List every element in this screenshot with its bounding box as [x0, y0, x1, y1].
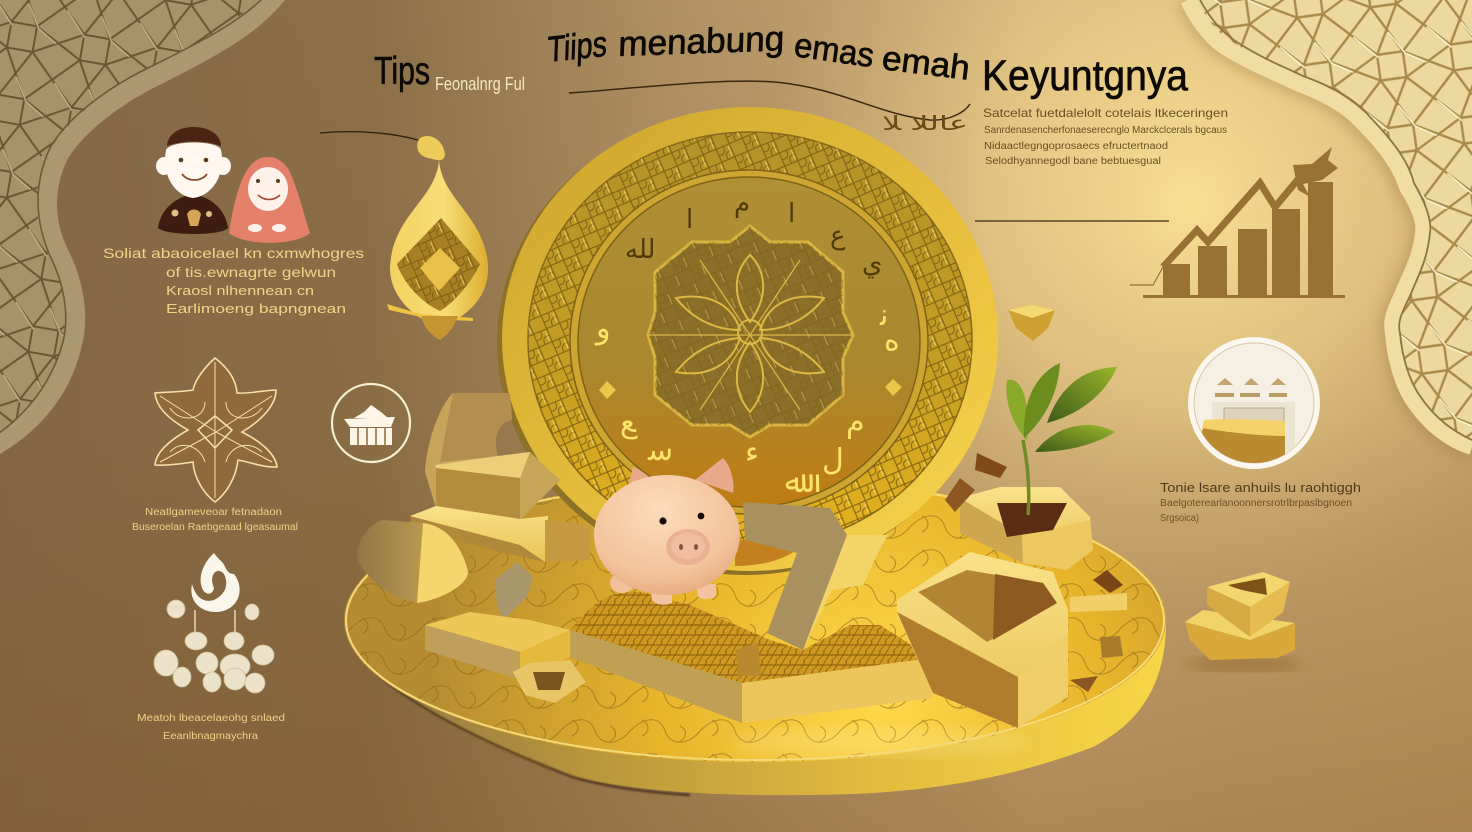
icon: gold lantern — [387, 136, 488, 340]
text block: coins caption: Meatoh lbeacelaeohg snlaed — [137, 713, 285, 724]
text block: top right — [983, 106, 1228, 167]
subtitle: Tips — [374, 50, 430, 93]
text block: coins caption: Eeanlbnagmaychra — [163, 731, 258, 742]
big number-like gold bar 7 — [743, 502, 888, 650]
stacked gold blocks right — [1185, 572, 1301, 671]
title: Keyuntgnya — [982, 52, 1188, 100]
text block: photo caption: Tonie lsare anhuils lu raohtiggh — [1160, 480, 1361, 495]
text block: photo caption: Baelgoterearlanoonnersrotrlbrpaslbgnoen — [1160, 498, 1352, 509]
coin dark inscription: ﻟﻠﻪ — [625, 234, 655, 264]
chart connector line — [975, 220, 1169, 222]
main platform disc — [344, 478, 1166, 795]
coin inner field — [578, 177, 920, 507]
gold bars left — [357, 393, 590, 620]
text block: coins caption — [137, 713, 285, 742]
text block: couple caption: Kraosl nlhennean cn — [166, 283, 314, 298]
text block: top right: Nidaactlegngoprosaecs efructertnaod — [984, 141, 1168, 152]
chart: rising bars — [1130, 147, 1345, 298]
coin gold inscription: ﻝ — [822, 444, 844, 477]
text block: photo caption — [1160, 480, 1361, 524]
coin gold inscription: ﺳ — [647, 434, 673, 467]
small blocks on platform — [513, 453, 1127, 703]
main gold coin — [497, 107, 998, 575]
title: emah — [880, 39, 972, 88]
subtitle — [374, 50, 525, 94]
coin dark inscription: ﺍ — [686, 204, 693, 234]
coin gold inscription: ﻧ — [879, 299, 888, 332]
text block: couple caption: of tis.ewnagrte gelwun — [166, 264, 336, 280]
subtitle: Feonalnrg Ful — [435, 74, 525, 94]
coin gold inscription: ﻩ — [884, 324, 900, 357]
icon: flower outline — [155, 358, 277, 502]
coin dark inscription: ﻱ — [862, 248, 882, 278]
coin inner ring — [570, 170, 928, 514]
piggy bank — [594, 458, 740, 605]
title swoosh line — [569, 81, 970, 120]
icon: circle badge — [332, 384, 410, 462]
text block: flower caption: Neatlgameveoar fetnadaon — [145, 507, 282, 518]
text block: top right: Sanrdenasencherfonaeserecnglo Marckclcerals bgcaus — [984, 125, 1227, 136]
arabic ornament label: ﻋﺎﻟﻠﺎ ﻠﺎ — [882, 113, 968, 135]
orange piece behind seven — [735, 540, 805, 566]
coin dark inscription — [625, 188, 882, 278]
title — [547, 19, 1188, 100]
icon: crescent and coins — [154, 553, 274, 693]
text block: flower caption — [132, 507, 298, 533]
gold star-shaped slab center — [425, 592, 932, 723]
text block: couple caption: Soliat abaoicelael kn cxmwhogres — [103, 245, 364, 261]
coin gold inscription — [594, 299, 900, 499]
coin gold inscription: ﻊ — [620, 406, 638, 440]
text block: couple caption — [103, 245, 364, 316]
coin central octagon — [648, 226, 853, 437]
coin gold inscription: ﺀ — [745, 436, 759, 469]
text block: couple caption: Earlimoeng bapngnean — [166, 301, 346, 316]
coin dark inscription: ﻡ — [734, 188, 750, 218]
small gold diamond — [1008, 305, 1055, 341]
text block: flower caption: Buseroelan Raebgeaad lgeasaumal — [132, 522, 298, 533]
coin gold inscription: ﷲ — [785, 466, 820, 499]
coin dark inscription: ﺍ — [788, 198, 795, 228]
pentagon gold box right — [897, 552, 1068, 728]
coin gold inscription: ﻡ — [846, 406, 865, 439]
text block: top right: Selodhyannegodl bane bebtuesgual — [985, 156, 1161, 167]
coin small diamonds — [599, 379, 902, 399]
ornament: top-left lattice corner — [0, 0, 277, 447]
ornament: top-right lattice corner — [1183, 0, 1472, 453]
title: menabung — [618, 19, 785, 64]
coin dark inscription: ﻉ — [830, 220, 846, 250]
text block: top right: Satcelat fuetdalelolt cotelais ltkeceringen — [983, 106, 1228, 120]
text block: photo caption: Srgsoica) — [1160, 513, 1199, 524]
title: Tiips — [547, 23, 608, 70]
coin gold inscription: ﻭ — [594, 312, 610, 346]
icon: photo circle — [1188, 337, 1320, 470]
icon: couple — [156, 127, 310, 243]
plant and pot right — [960, 363, 1117, 570]
connector line to lantern — [320, 132, 418, 140]
title: emas — [792, 26, 876, 75]
